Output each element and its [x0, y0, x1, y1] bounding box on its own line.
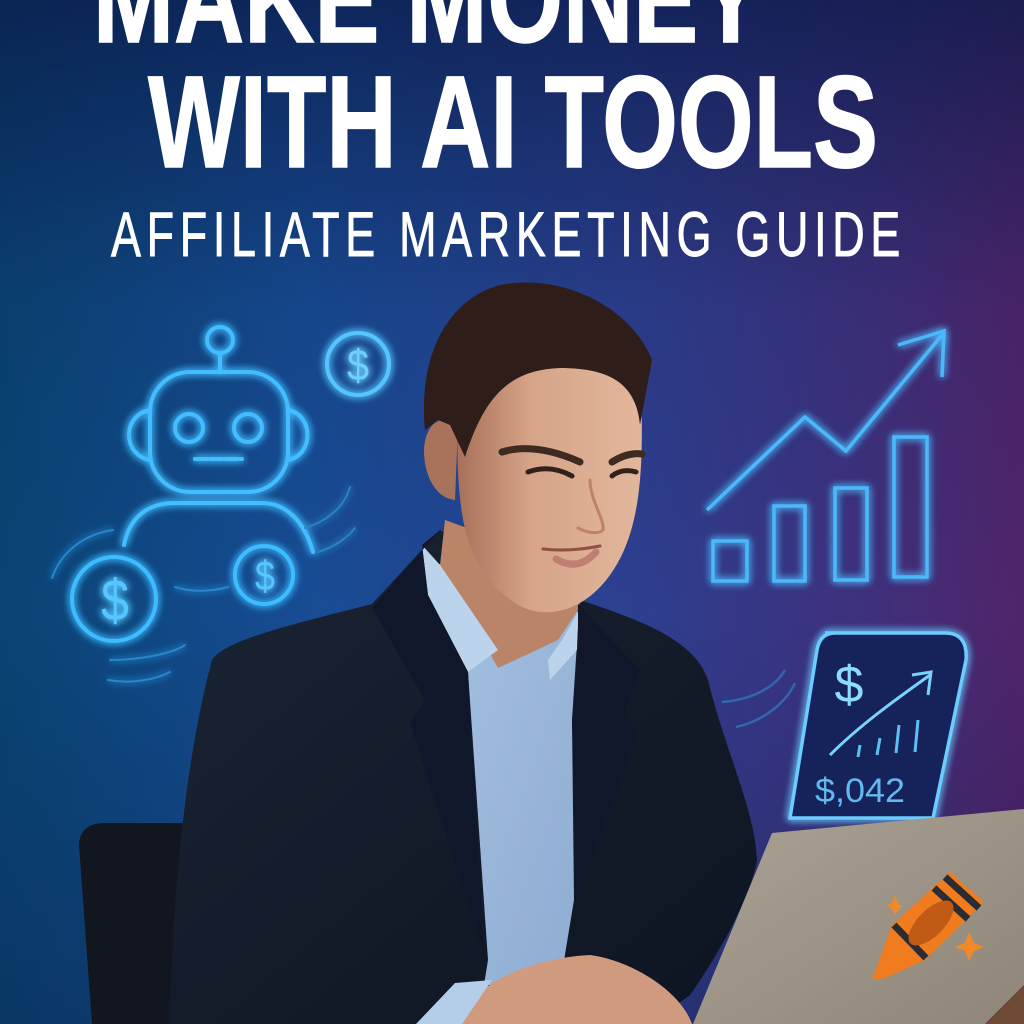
hand [455, 955, 692, 1024]
icon: dollar coin top [327, 333, 389, 395]
card: earnings [790, 633, 966, 818]
facial features [502, 449, 642, 564]
card: earnings: $,042 [815, 772, 905, 810]
card: earnings: $ [835, 656, 864, 714]
lapels [372, 530, 640, 955]
icon: crayon logo [872, 872, 984, 980]
icon: dollar coin middle: $ [255, 552, 275, 599]
ear [424, 420, 458, 500]
table [985, 985, 1024, 1024]
neck [440, 520, 590, 668]
hair [424, 282, 652, 457]
icon: dollar coin left [72, 557, 156, 641]
icon: dollar coin top: $ [347, 341, 369, 390]
icon: swoosh lines [722, 670, 795, 727]
shirt [425, 560, 579, 985]
icon: dollar coin left: $ [101, 568, 129, 633]
chart: rising bars and arrow [707, 331, 944, 581]
shirt collar [422, 545, 578, 680]
cuff [416, 980, 492, 1024]
man [170, 282, 757, 1024]
title [93, 0, 878, 195]
icon: dollar coin middle [235, 546, 293, 604]
laptop [693, 809, 1024, 1024]
suit jacket [170, 530, 757, 1024]
chair [79, 823, 185, 1024]
icon: robot [52, 327, 355, 682]
face [457, 353, 642, 612]
